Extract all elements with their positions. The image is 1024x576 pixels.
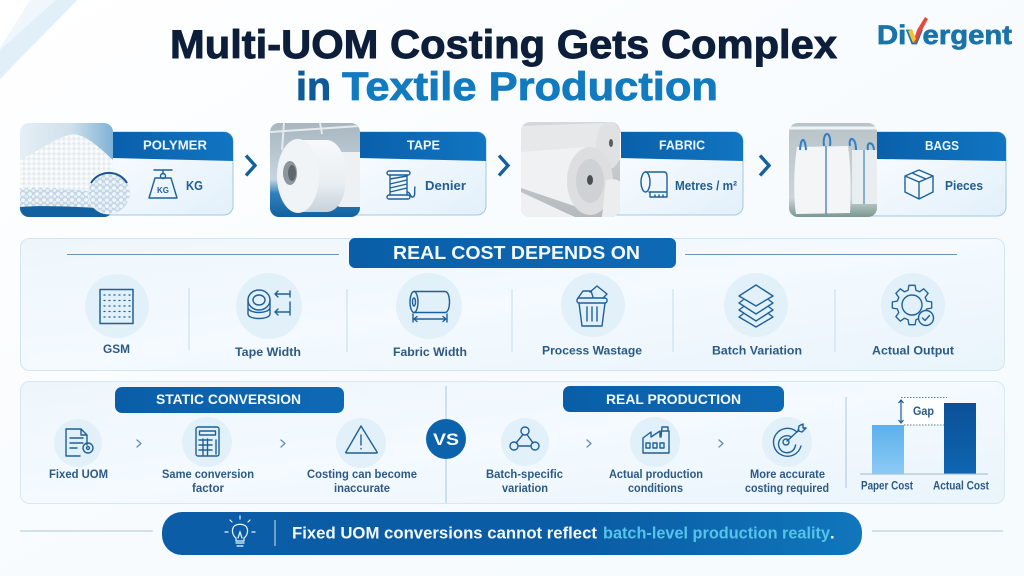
step: polymer [20, 123, 233, 217]
card: bags: Pieces [945, 178, 983, 193]
item: batch-specific variation: Batch-specific [486, 469, 564, 481]
item: costing inaccurate: inaccurate [334, 483, 390, 495]
photo: tape spool [270, 123, 365, 217]
heading: real production [563, 386, 784, 412]
section: real production [486, 386, 989, 495]
section: static conversion [49, 387, 417, 495]
heading: static conversion: STATIC CONVERSION [156, 392, 301, 407]
gap label: Gap [913, 406, 934, 418]
factor: GSM: GSM [103, 344, 130, 356]
icon: fabric roll with ruler [641, 172, 667, 197]
title: Textile Production [342, 65, 718, 109]
footer message: . [830, 524, 835, 542]
item: fixed UOM [49, 419, 108, 481]
card: tape: Denier [425, 178, 466, 193]
gap arrow [898, 400, 904, 423]
card: bags [870, 132, 1006, 216]
logo: Divergent: Divergent [877, 20, 1012, 50]
item: batch-specific variation [486, 418, 564, 495]
title: Multi-UOM Costing Gets Complex [170, 23, 837, 67]
label: actual cost: Actual Cost [933, 480, 989, 492]
card: bags: BAGS [925, 138, 959, 153]
panel: comparison [20, 382, 1004, 555]
title: in [296, 65, 331, 109]
footer message [292, 524, 835, 542]
card: fabric: Metres / m² [675, 178, 738, 193]
item: more accurate costing: costing required [745, 483, 829, 495]
arrow: polymer to tape [246, 156, 255, 176]
card: polymer [105, 132, 233, 215]
photo inset: pellet close-up [88, 172, 130, 214]
icon: lightbulb [225, 516, 255, 546]
footer rule lines [20, 530, 1003, 532]
chevron [137, 440, 141, 447]
icon: box [905, 170, 933, 199]
footer message: batch-level production reality [603, 524, 831, 542]
heading: static conversion [115, 387, 344, 413]
card: tape: TAPE [407, 138, 440, 152]
item: same conversion factor: Same conversion [162, 469, 254, 481]
panel: real cost depends on [20, 238, 1004, 370]
icon: kg weight [149, 170, 177, 198]
factor: batch variation [712, 273, 802, 358]
panel background [20, 238, 1004, 370]
item: more accurate costing: More accurate [750, 469, 825, 481]
bar chart: paper vs actual cost [860, 398, 989, 492]
factor: batch variation: Batch Variation [712, 346, 802, 358]
chevron [719, 440, 723, 447]
bar: paper cost [872, 425, 904, 474]
icon: thread spool [387, 171, 415, 199]
comparison background [20, 382, 1004, 504]
photo: polymer pellets [20, 123, 113, 217]
item: actual production conditions [609, 417, 703, 495]
heading pill: REAL COST DEPENDS ON [393, 242, 640, 263]
title [170, 23, 837, 109]
footer message: Fixed UOM conversions cannot reflect [292, 524, 598, 542]
factor: GSM [85, 274, 149, 356]
icon: kg weight: KG [157, 186, 169, 195]
item: actual production conditions: Actual production [609, 469, 703, 481]
chevron [587, 440, 591, 447]
factor: actual output [872, 273, 954, 358]
factor: process wastage: Process Wastage [542, 346, 642, 358]
bar: actual cost [944, 403, 976, 474]
factor: actual output: Actual Output [872, 346, 954, 358]
step: fabric [521, 121, 743, 217]
item: costing inaccurate: Costing can become [307, 469, 417, 481]
factor: tape width [235, 273, 302, 359]
column divider [445, 386, 447, 503]
footer banner [162, 512, 862, 555]
factor: fabric width: Fabric Width [393, 347, 467, 359]
chart divider [845, 397, 847, 488]
item: batch-specific variation: variation [502, 483, 548, 495]
item: same conversion factor: factor [192, 483, 225, 495]
photo: fabric rolls [521, 121, 622, 217]
card: polymer: KG [186, 178, 203, 193]
VS badge: VS [433, 430, 459, 449]
card: fabric: FABRIC [659, 138, 706, 152]
step: bags [789, 123, 1006, 217]
card: polymer: POLYMER [143, 138, 208, 152]
heading lines [67, 254, 957, 256]
arrow: fabric to bags [760, 156, 769, 176]
label: paper cost: Paper Cost [861, 480, 913, 492]
item: costing inaccurate [307, 418, 417, 495]
step: tape [270, 123, 486, 217]
decorative corner streak [0, 0, 78, 79]
card: tape [352, 132, 486, 215]
photo: bulk bags [789, 123, 877, 217]
item: fixed UOM: Fixed UOM [49, 469, 108, 481]
item: same conversion factor [162, 417, 254, 495]
process flow row [20, 121, 1006, 217]
factor: tape width: Tape Width [235, 347, 301, 359]
item: more accurate costing [745, 417, 829, 495]
heading: real production: REAL PRODUCTION [606, 392, 741, 407]
factor: fabric width [393, 273, 467, 359]
factor: process wastage [542, 273, 642, 358]
item: actual production conditions: conditions [628, 483, 683, 495]
VS badge [426, 419, 466, 459]
heading pill [349, 238, 676, 268]
arrow: tape to fabric [499, 156, 508, 176]
chevron [281, 440, 285, 447]
card: fabric [612, 132, 743, 215]
gap highlight [904, 398, 944, 425]
